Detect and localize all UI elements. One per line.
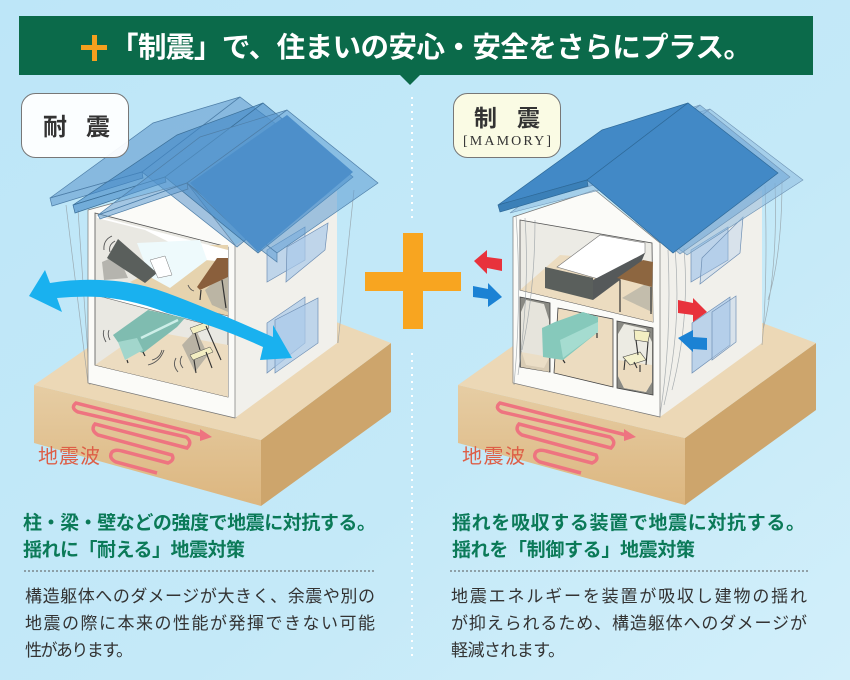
roof ghost 1 <box>50 97 333 247</box>
windows <box>691 217 743 373</box>
bed and pillow <box>102 239 207 288</box>
body text: left: 地震の際に本来の性能が発揮できない可能 <box>25 614 375 633</box>
heading: left <box>23 512 376 561</box>
body text: right <box>451 587 807 660</box>
room opening <box>95 213 228 397</box>
heading: right <box>452 512 805 561</box>
wall ghost lines <box>66 190 354 418</box>
big plus <box>365 233 461 329</box>
body text: right: 地震エネルギーを装置が吸収し建物の揺れ <box>451 587 807 606</box>
badge: resistant: 耐 <box>43 114 67 141</box>
lower right room <box>617 321 653 395</box>
roof ghost 2 <box>73 103 353 253</box>
lower left room <box>520 297 550 372</box>
body text: right: が抑えられるため、構造躯体へのダメージが <box>451 614 807 633</box>
bed <box>545 235 645 300</box>
arrow: blue left <box>678 330 707 352</box>
roof ghost far <box>510 109 803 255</box>
front wall <box>513 190 660 417</box>
arrow: red right <box>678 298 707 322</box>
heading: left: 柱・梁・壁などの強度で地震に対抗する。 <box>23 512 376 534</box>
house: resistant (left) <box>29 97 378 418</box>
heading: right: 揺れを吸収する装置で地震に対抗する。 <box>452 512 805 534</box>
table <box>197 258 228 312</box>
front wall <box>88 183 235 418</box>
chair <box>182 322 221 373</box>
roof ghost 3 <box>98 110 378 262</box>
badge: damping MAMORY <box>454 94 560 158</box>
badge: resistant <box>22 94 128 158</box>
ground: right <box>458 270 816 505</box>
curtains <box>514 180 782 415</box>
center divider <box>411 97 413 660</box>
seismic wave: left <box>73 403 212 473</box>
shake marks <box>103 236 194 372</box>
arrow: sway <box>29 270 292 360</box>
header banner <box>19 16 813 85</box>
arrow: red left <box>474 250 502 274</box>
icon: small plus <box>81 35 107 61</box>
chair <box>623 330 650 372</box>
heading: right: 揺れを「制御する」地震対策 <box>452 539 695 561</box>
badge: damping MAMORY: [MAMORY] <box>463 134 551 149</box>
badge: damping MAMORY: 制 <box>474 105 497 131</box>
ground: left <box>34 270 391 506</box>
badge: resistant: 震 <box>86 114 110 141</box>
title: 「制震」で、住まいの安心・安全をさらにプラス。 <box>110 32 752 64</box>
divider lines <box>24 570 808 572</box>
roof main <box>498 103 778 253</box>
sofa <box>542 312 598 363</box>
house: damped (right) <box>473 103 803 417</box>
upper room <box>520 220 653 322</box>
windows <box>267 223 328 373</box>
lower centre room <box>554 308 613 387</box>
seismic wave: right <box>497 403 636 473</box>
body text: left: 性があります。 <box>25 641 133 660</box>
right wall <box>660 190 762 417</box>
arrow: blue right <box>473 283 502 307</box>
badge: damping MAMORY: 震 <box>517 105 540 131</box>
sofa <box>113 310 185 363</box>
body text: right: 軽減されます。 <box>451 641 565 660</box>
label: seismic wave right: 地震波 <box>462 445 525 468</box>
right wall <box>235 190 337 418</box>
body text: left <box>25 587 375 660</box>
heading: left: 揺れに「耐える」地震対策 <box>23 539 245 561</box>
body text: left: 構造躯体へのダメージが大きく、余震や別の <box>25 587 375 606</box>
table <box>617 260 653 314</box>
roof main slope <box>190 115 353 252</box>
roof ghost middle <box>505 105 790 254</box>
label: seismic wave left: 地震波 <box>38 445 100 468</box>
